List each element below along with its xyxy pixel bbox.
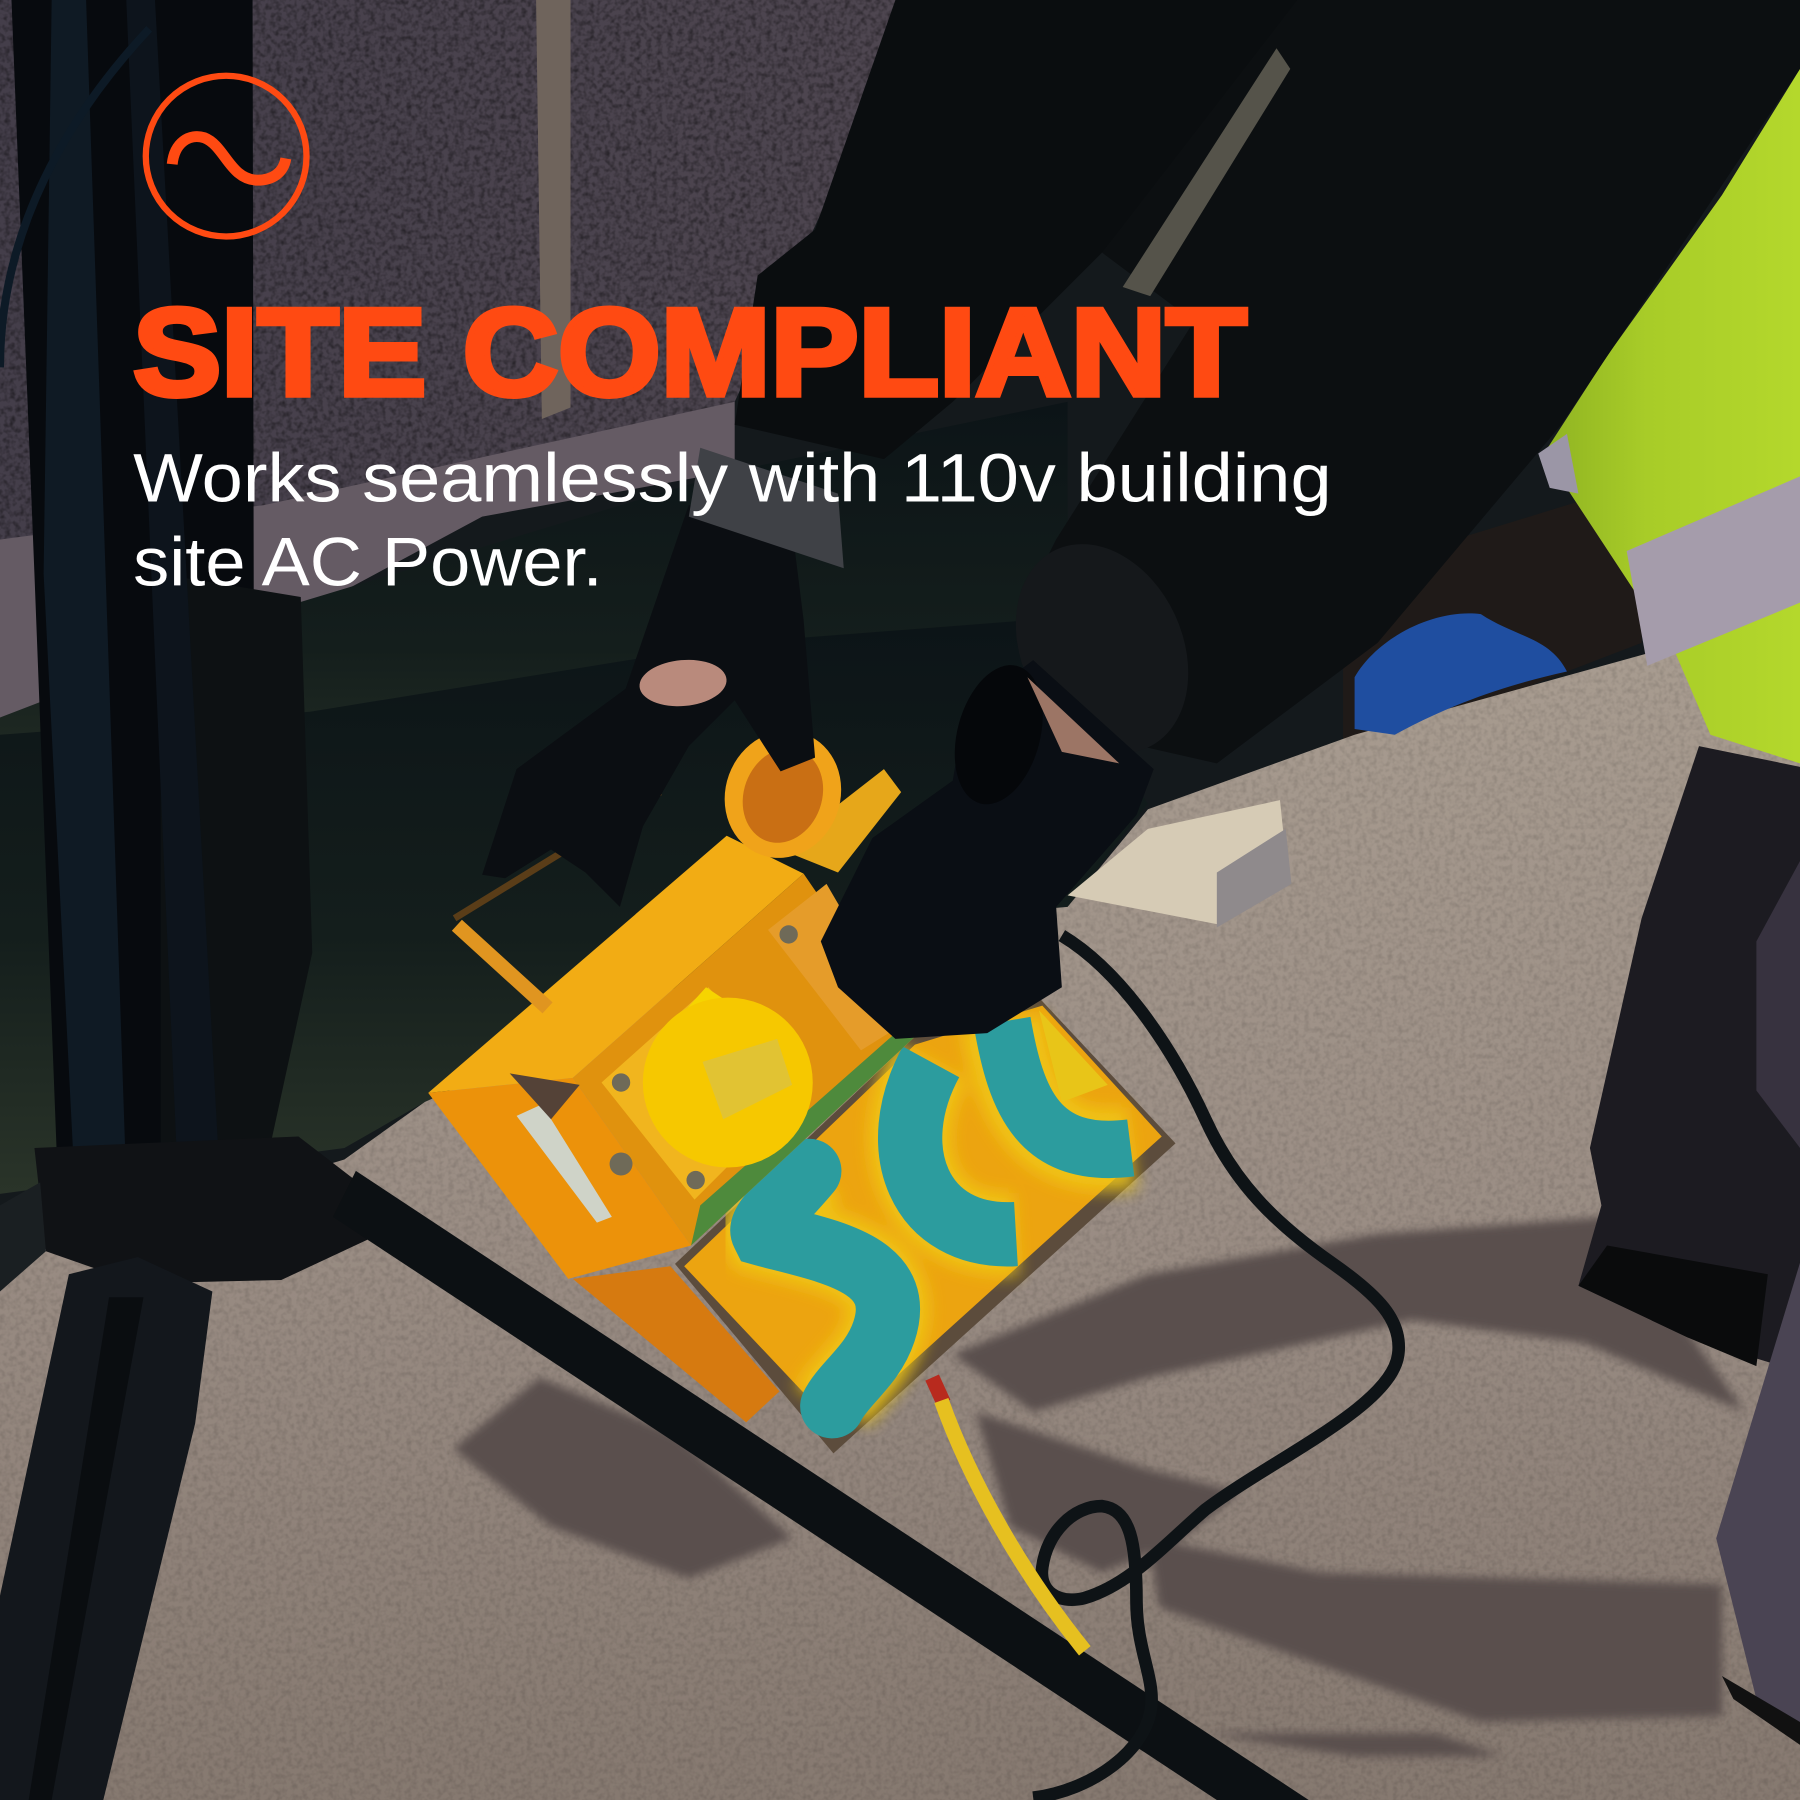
handle bar (457, 925, 548, 1008)
thin handle wire (455, 792, 660, 918)
description text: Works seamlessly with 110v building (133, 440, 1332, 517)
floor shadows (453, 1217, 1745, 1756)
left gloved hand (482, 448, 844, 907)
white block on floor (1068, 800, 1291, 928)
tripod (0, 0, 373, 1800)
concrete floor (0, 620, 1800, 1800)
left arm sleeve (735, 0, 1303, 459)
background wall (0, 0, 1800, 1263)
yellow paint highlight (1039, 1010, 1108, 1102)
high-vis jacket (1538, 69, 1800, 763)
trousers right (1578, 746, 1800, 1745)
tripod thin cable (0, 29, 149, 367)
side face (428, 1078, 691, 1279)
socket base plate (602, 987, 804, 1200)
top face (428, 836, 804, 1093)
teal paint marks (763, 1022, 1131, 1406)
tripod diagonal leg (333, 1171, 1309, 1800)
yellow glow around paint (763, 1022, 1131, 1406)
rust corner (510, 1073, 580, 1119)
socket cap (707, 714, 901, 874)
black power cable (1033, 936, 1399, 1798)
icon: AC sine wave (146, 76, 307, 236)
right arm sleeve (983, 0, 1800, 781)
lower orange panel (573, 1266, 779, 1422)
yellow power cable (932, 1378, 1085, 1651)
screws (610, 925, 798, 1189)
front face (573, 874, 915, 1246)
green sticker label (517, 1104, 612, 1223)
second socket plate (768, 884, 907, 1050)
painted rear plate (684, 1006, 1162, 1429)
right gloved hand with watch (821, 655, 1154, 1039)
title: SITE COMPLIANT (133, 284, 1247, 422)
yellow socket (643, 987, 813, 1167)
description text (133, 440, 1332, 600)
rear plate rust rim (675, 996, 1176, 1453)
blue cloth (1355, 613, 1567, 735)
description text: site AC Power. (133, 523, 603, 600)
yellow junction box (428, 714, 1176, 1453)
